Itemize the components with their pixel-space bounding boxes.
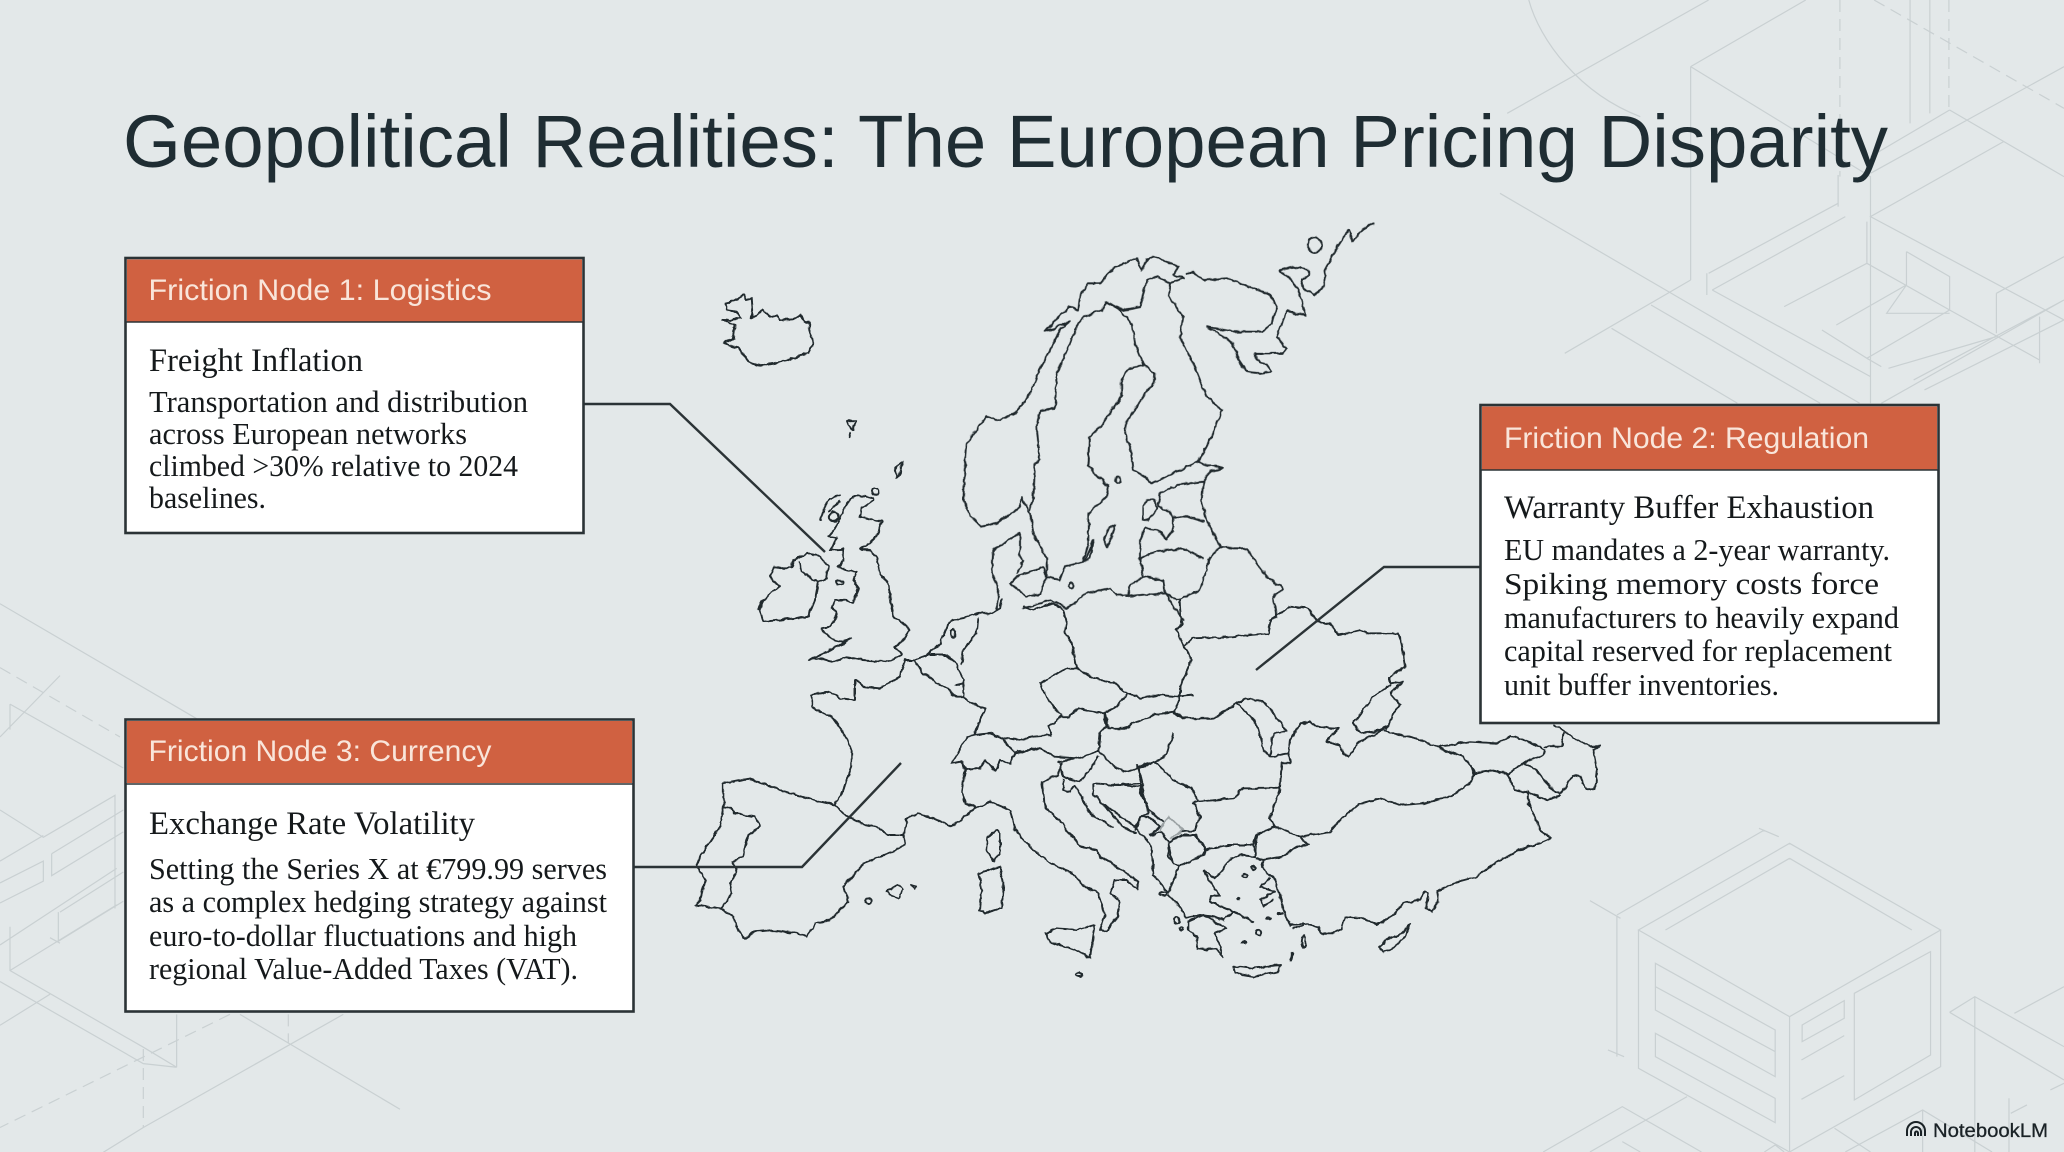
subheading: exchange rate volatility: Exchange Rate Volatility — [149, 806, 476, 842]
body text: exchange rate volatility: Setting the Series X at €799.99 serves — [149, 852, 607, 886]
heading: friction node 2: Friction Node 2: Regulation — [1504, 422, 1869, 455]
panel: friction node 3 — [126, 720, 634, 1012]
watermark: NotebookLM: NotebookLM — [1933, 1120, 2048, 1142]
body text: freight inflation: baselines. — [149, 481, 266, 515]
body text: warranty buffer exhaustion: unit buffer inventories. — [1504, 668, 1779, 702]
heading: friction node 1: Friction Node 1: Logistics — [148, 274, 492, 307]
body text: warranty buffer exhaustion: manufacturers to heavily expand — [1504, 601, 1899, 635]
body text: freight inflation: Transportation and distribution — [149, 385, 528, 419]
map: north-west islands and Great Britain — [722, 295, 910, 662]
subheading: freight inflation: Freight Inflation — [149, 343, 363, 379]
subheading: warranty buffer exhaustion: Warranty Buffer Exhaustion — [1504, 490, 1874, 526]
panel: friction node 2 — [1480, 405, 1938, 723]
heading: friction node 3: Friction Node 3: Currency — [148, 735, 492, 768]
panel: friction node 1 — [126, 258, 584, 533]
leader line: node 1 — [583, 404, 825, 552]
map of Europe — [695, 223, 1600, 977]
map: eastern Europe and Turkey — [1100, 600, 1600, 977]
leader line: node 2 — [1256, 567, 1480, 670]
body text: exchange rate volatility: regional Value-Added Taxes (VAT). — [149, 952, 578, 986]
map: western and central Europe — [695, 600, 1193, 976]
blueprint: top right machinery — [1500, 0, 2064, 403]
map: Scandinavia, Finland, Kola and Baltics — [963, 223, 1373, 620]
leader line: node 3 — [633, 763, 901, 867]
title: Geopolitical Realities: The European Pricing Disparity — [123, 100, 1888, 183]
body text: exchange rate volatility: as a complex hedging strategy against — [149, 885, 608, 919]
body text: freight inflation: climbed >30% relative to 2024 — [149, 449, 518, 483]
body text: freight inflation — [149, 385, 528, 515]
blueprint: bottom right cube — [1543, 828, 2064, 1152]
icon: NotebookLM arcs — [1907, 1122, 1925, 1136]
body text: warranty buffer exhaustion: Spiking memory costs force — [1504, 567, 1879, 601]
body text: warranty buffer exhaustion: capital reserved for replacement — [1504, 634, 1893, 668]
body text: exchange rate volatility: euro-to-dollar fluctuations and high — [149, 919, 577, 953]
blueprint: left machinery — [0, 604, 400, 1152]
body text: exchange rate volatility — [149, 852, 608, 986]
body text: warranty buffer exhaustion: EU mandates a 2-year warranty. — [1504, 533, 1890, 567]
body text: freight inflation: across European networks — [149, 417, 467, 451]
body text: warranty buffer exhaustion — [1504, 533, 1899, 702]
